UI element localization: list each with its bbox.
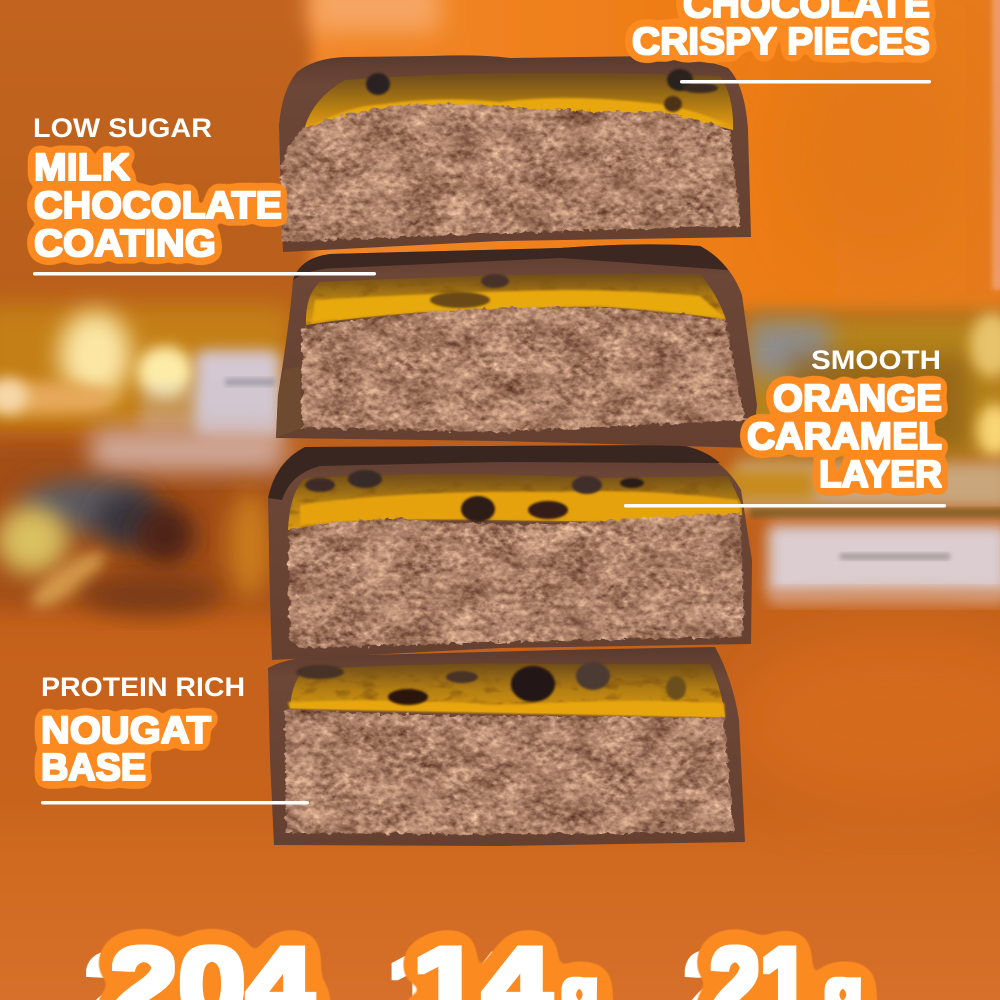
blurred orange bottle [310, 0, 1000, 312]
blurred product group, left [0, 305, 290, 617]
heading: milk chocolate coating: COATING [34, 223, 216, 265]
nutrition stats row [110, 927, 862, 1000]
heading: orange caramel layer [747, 378, 942, 496]
label: orange caramel layer [624, 345, 946, 508]
bar 4 (bottom) [268, 647, 745, 846]
stat: 14g [412, 927, 598, 1000]
blurred product group, right [725, 313, 1000, 604]
heading: milk chocolate coating: CHOCOLATE [34, 185, 282, 227]
sub-heading: smooth: SMOOTH [811, 345, 941, 375]
leader line [41, 801, 309, 804]
bar 3 [268, 445, 752, 660]
heading: orange caramel layer: CARAMEL [747, 416, 942, 458]
bar 1 (top) [279, 55, 751, 252]
bar 2 [276, 244, 757, 448]
heading: chocolate crispy pieces [632, 0, 930, 63]
heading: nougat base: NOUGAT [41, 710, 211, 752]
leader line [624, 504, 946, 508]
heading: orange caramel layer: ORANGE [773, 378, 942, 420]
label: nougat base [41, 672, 309, 804]
leader line [680, 80, 931, 84]
heading: milk chocolate coating: MILK [34, 147, 131, 189]
heading: milk chocolate coating [34, 147, 282, 265]
stacked bars cross-section [268, 55, 757, 846]
heading: nougat base: BASE [41, 747, 146, 789]
heading: chocolate crispy pieces: CRISPY PIECES [632, 21, 930, 63]
sub-heading: low sugar: LOW SUGAR [33, 113, 212, 143]
label: milk chocolate coating [33, 113, 376, 276]
heading: orange caramel layer: LAYER [819, 454, 942, 496]
leader line [33, 272, 376, 276]
heading: nougat base [41, 710, 211, 789]
label: chocolate crispy pieces [632, 0, 931, 84]
sub-heading: protein rich: PROTEIN RICH [41, 672, 245, 702]
orange table surface, right glow [730, 630, 1000, 810]
